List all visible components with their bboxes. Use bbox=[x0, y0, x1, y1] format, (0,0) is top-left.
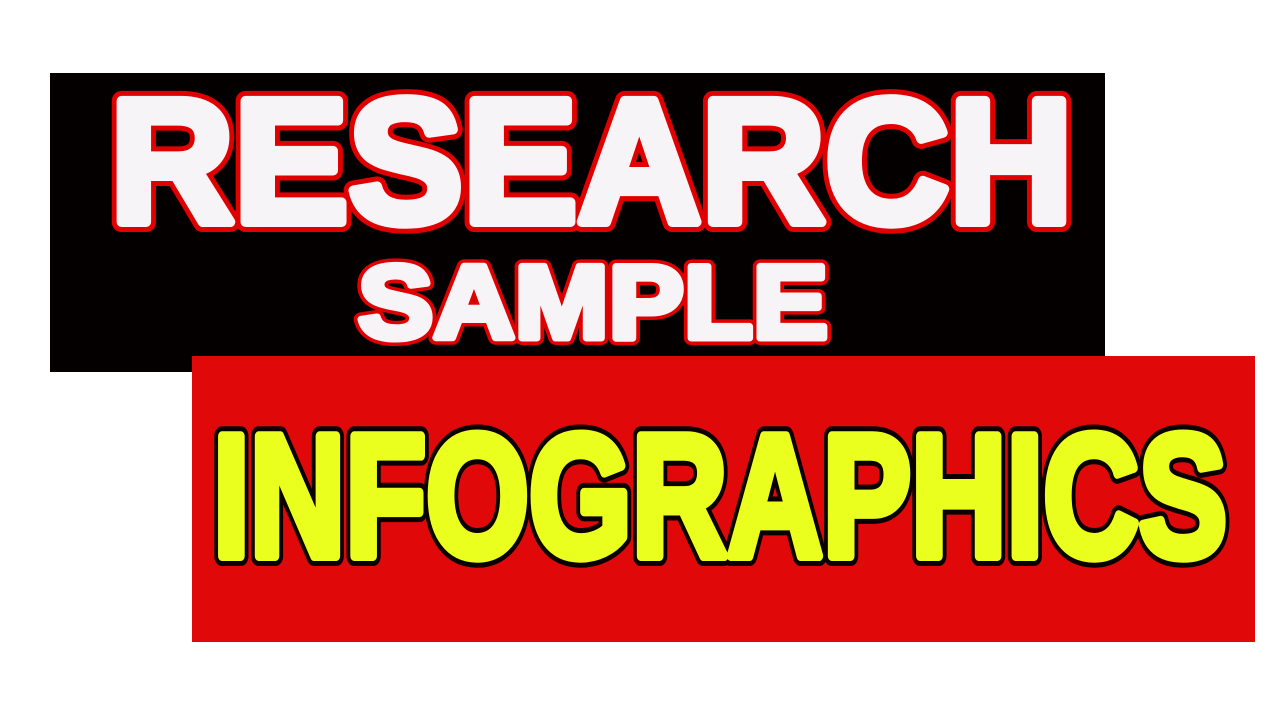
panel: black title banner bbox=[50, 64, 1105, 372]
title: RESEARCH: RESEARCH bbox=[110, 64, 1073, 260]
subtitle: SAMPLE: SAMPLE bbox=[358, 245, 828, 361]
subtitle: SAMPLE: SAMPLE bbox=[358, 245, 828, 361]
title: RESEARCH: RESEARCH bbox=[110, 64, 1073, 260]
panel: red banner bbox=[192, 356, 1255, 642]
